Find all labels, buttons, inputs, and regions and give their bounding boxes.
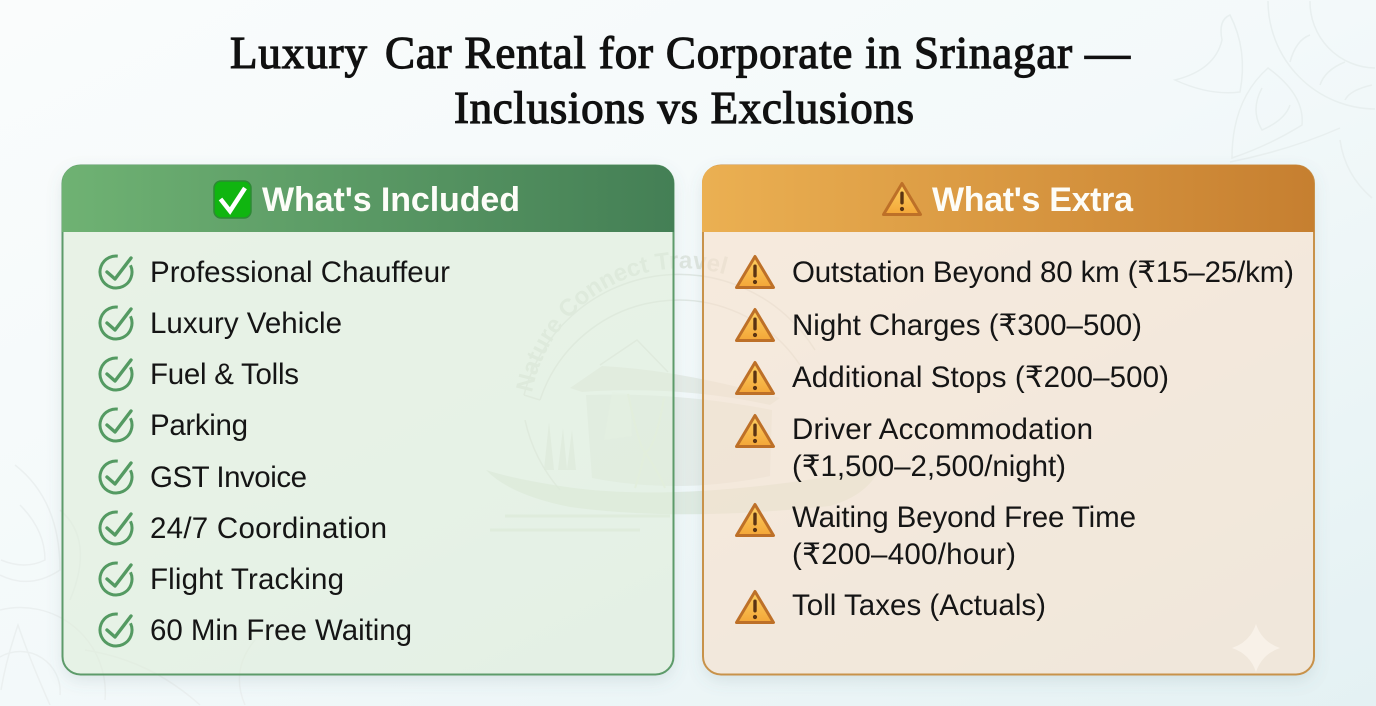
icon: green check box [214,181,251,218]
boat hull [486,468,880,514]
mandala decoration bottom left [0,465,255,705]
item: Flight Tracking [95,558,344,600]
mandala decoration top right [1175,1,1375,198]
panel header: included [62,165,674,232]
boat cabin [586,395,772,486]
item: Fuel & Tolls [95,353,299,395]
item: Parking: Parking [150,409,248,442]
item: waiting: Waiting Beyond Free Time [792,501,1136,534]
hill and trees [600,340,668,372]
title: Inclusions vs Exclusions [454,83,914,133]
title: Luxury [230,28,368,78]
water ripples [490,516,670,530]
panel: what's extra [702,165,1314,674]
item: Parking [95,404,248,446]
item: additional stops: Additional Stops (₹200–500) [792,361,1169,394]
panel: what's included [62,165,674,674]
item: toll taxes: Toll Taxes (Actuals) [792,589,1046,622]
item: Luxury Vehicle [95,302,342,344]
item: 24/7 Coordination: 24/7 Coordination [150,512,387,545]
item: waiting [736,501,1136,571]
icon: warning triangle [884,184,920,214]
item: Professional Chauffeur [95,251,450,293]
item: waiting: (₹200–400/hour) [792,538,1016,571]
item: 60 Min Free Waiting: 60 Min Free Waiting [150,614,412,647]
boat roof [570,366,780,405]
heading: what's included: What's Included [262,181,520,219]
item: Fuel & Tolls: Fuel & Tolls [150,358,299,391]
item: Professional Chauffeur: Professional Chauffeur [150,256,450,289]
panel header: extra [702,165,1314,232]
item: Flight Tracking: Flight Tracking [150,563,344,596]
item: outstation: Outstation Beyond 80 km (₹15–25/km) [792,256,1294,289]
item: 60 Min Free Waiting [95,609,412,651]
extras list [736,256,1294,622]
item: GST Invoice: GST Invoice [150,461,307,494]
item: driver accommodation: (₹1,500–2,500/night) [792,450,1066,483]
icon: sparkle [1232,624,1280,672]
item: driver accommodation: Driver Accommodation [792,413,1093,446]
watermark text: Nature Connect Travel [516,252,728,391]
item: Luxury Vehicle: Luxury Vehicle [150,307,342,340]
title [230,28,1131,133]
item: night charges: Night Charges (₹300–500) [792,309,1142,342]
heading: what's extra: What's Extra [932,181,1134,219]
item: driver accommodation [736,413,1093,483]
title: Car Rental for Corporate in Srinagar — [385,28,1131,78]
watermark: Nature Connect Travel houseboat [487,252,879,532]
included list [95,251,450,651]
item: GST Invoice [95,456,307,498]
item: 24/7 Coordination [95,507,387,549]
